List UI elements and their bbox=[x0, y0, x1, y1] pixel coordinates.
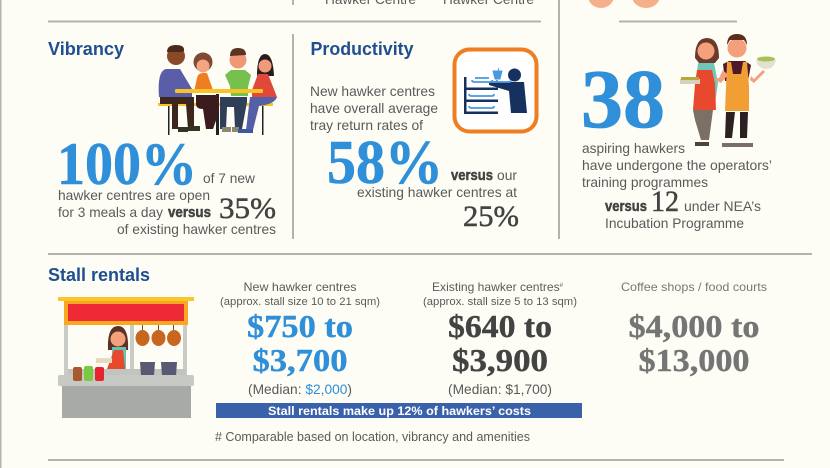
column: new hawker centres: (approx. stall size 10 to 21 sqm) bbox=[220, 296, 380, 308]
text: vibrancy description: versus bbox=[168, 204, 211, 221]
callout: rental share of costs bbox=[216, 403, 582, 418]
stat: 38: 38 bbox=[581, 53, 665, 146]
text: training description: have undergone the operators’ bbox=[582, 157, 772, 173]
panel: stall rentals bbox=[48, 265, 767, 444]
column: new hawker centres bbox=[220, 280, 380, 397]
column: coffee shops bbox=[621, 280, 767, 378]
column: new hawker centres: $3,700 bbox=[252, 342, 348, 378]
text: productivity comparison: existing hawker centres at bbox=[357, 184, 517, 200]
text: productivity comparison: versus bbox=[451, 167, 493, 184]
column: existing hawker centres: (approx. stall size 5 to 13 sqm) bbox=[423, 296, 577, 308]
column: existing hawker centres: (Median: $1,700) bbox=[448, 381, 552, 397]
icon: faces cut off at top bbox=[588, 0, 660, 8]
text: productivity intro: New hawker centres bbox=[310, 83, 435, 99]
column: existing hawker centres: $640 to bbox=[448, 308, 552, 344]
column: coffee shops: $13,000 bbox=[638, 342, 750, 378]
text: productivity comparison bbox=[357, 167, 519, 233]
text: training description: aspiring hawkers bbox=[582, 140, 685, 156]
column: existing hawker centres: $3,900 bbox=[452, 342, 548, 378]
text: productivity intro: have overall average bbox=[310, 100, 438, 116]
column: new hawker centres: $750 to bbox=[247, 308, 353, 344]
text: training description: under NEA’s bbox=[684, 198, 761, 214]
text: vibrancy description: for 3 meals a day bbox=[58, 204, 163, 220]
column: existing hawker centres bbox=[423, 280, 577, 397]
column: existing hawker centres: Existing hawker centres bbox=[432, 280, 559, 294]
heading: vibrancy: Vibrancy bbox=[48, 39, 124, 59]
text: training description: Incubation Programme bbox=[605, 215, 744, 231]
text: training description bbox=[582, 140, 772, 231]
text: productivity intro: tray return rates of bbox=[310, 117, 423, 133]
icon: hawker stall bbox=[58, 297, 194, 418]
text: vibrancy description bbox=[58, 170, 276, 237]
footnote: # Comparable based on location, vibrancy and amenities bbox=[215, 430, 530, 444]
text: vibrancy description: of 7 new bbox=[203, 170, 256, 186]
text: training description: training programmes bbox=[582, 174, 708, 190]
stat: 100%: 100% bbox=[57, 131, 197, 197]
column: existing hawker centres: # bbox=[560, 283, 564, 289]
heading: stall rentals: Stall rentals bbox=[48, 265, 150, 285]
callout: rental share of costs: Stall rentals make up 12% of hawkers’ costs bbox=[268, 404, 531, 418]
icon: tray return bbox=[454, 50, 536, 132]
icon: diners at table bbox=[158, 45, 277, 135]
panel: training bbox=[581, 34, 776, 231]
column: new hawker centres: (Median: $2,000) bbox=[248, 381, 352, 397]
panel: vibrancy bbox=[48, 39, 277, 237]
text: productivity intro bbox=[310, 83, 438, 133]
column: coffee shops: $4,000 to bbox=[628, 308, 760, 344]
text: vibrancy description: 35% bbox=[219, 192, 276, 225]
text: vibrancy description: of existing hawker centres bbox=[117, 221, 276, 237]
heading: productivity: Productivity bbox=[310, 39, 414, 59]
column: new hawker centres: New hawker centres bbox=[244, 280, 356, 294]
panel: productivity bbox=[310, 39, 536, 233]
text: training description: 12 bbox=[651, 185, 679, 218]
text: training description: versus bbox=[605, 198, 647, 215]
stat: 58%: 58% bbox=[327, 129, 443, 197]
text: vibrancy description: hawker centres are open bbox=[58, 187, 210, 203]
text: productivity comparison: 25% bbox=[463, 200, 519, 233]
text: productivity comparison: our bbox=[497, 167, 517, 183]
icon: hawker couple bbox=[680, 34, 776, 147]
top cut-off labels bbox=[325, 0, 534, 7]
column: coffee shops: Coffee shops / food courts bbox=[621, 280, 767, 294]
